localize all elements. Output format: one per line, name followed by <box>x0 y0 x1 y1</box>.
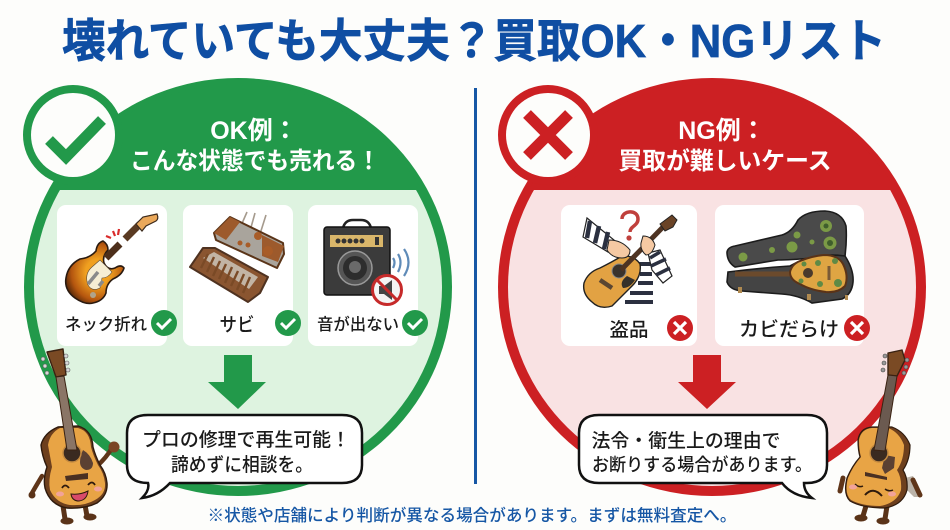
callout: repair advice: 諦めずに相談を。 <box>171 454 313 476</box>
card: mold <box>715 205 870 346</box>
callout: refusal reasons: 法令・衛生上の理由で <box>592 430 780 452</box>
panel heading: 買取が難しいケース <box>618 147 832 175</box>
icon: check mark <box>151 310 177 336</box>
panel: OK examples <box>23 60 452 498</box>
mascot: sad guitar <box>840 350 922 524</box>
icon: silent amplifier <box>324 220 408 304</box>
icon: broken electric guitar <box>66 214 158 303</box>
panel heading: こんな状態でも売れる！ <box>130 148 380 175</box>
icon: thief with guitar <box>583 212 677 307</box>
panel heading <box>130 117 380 175</box>
panel heading <box>618 117 832 175</box>
footnote: ※状態や店舗により判断が異なる場合があります。まずは無料査定へ。 <box>208 505 736 525</box>
callout: repair advice <box>127 415 362 498</box>
icon: cross mark <box>844 315 870 341</box>
arrow: down <box>678 355 736 409</box>
label: mold: カビだらけ <box>739 318 839 341</box>
callout: repair advice: プロの修理で再生可能！ <box>142 429 350 451</box>
panel heading: OK例： <box>210 117 298 145</box>
mascot: happy guitar <box>28 349 120 524</box>
icon: check badge <box>23 85 123 185</box>
icon: cross mark <box>667 315 693 341</box>
title: 壊れていても大丈夫？買取OK・NGリスト <box>62 15 886 67</box>
panel heading: NG例： <box>678 117 766 145</box>
red circle panel <box>498 60 926 496</box>
icon: rusty bridge <box>190 212 284 302</box>
panel: NG examples <box>498 60 926 498</box>
icon: moldy guitar case <box>727 211 853 303</box>
divider line <box>474 88 477 484</box>
card: no sound <box>308 205 428 346</box>
icon: cross badge <box>498 85 598 185</box>
icon: check mark <box>402 310 428 336</box>
icon: check mark <box>275 310 301 336</box>
label: rust: サビ <box>220 314 254 336</box>
card: stolen goods <box>561 205 697 346</box>
green circle panel <box>24 60 452 496</box>
label: stolen goods: 盗品 <box>610 319 648 341</box>
callout: refusal reasons: お断りする場合があります。 <box>592 454 812 475</box>
card: broken neck <box>57 205 177 346</box>
label: no sound: 音が出ない <box>317 314 399 334</box>
card: rust <box>183 205 301 346</box>
callout: refusal reasons <box>579 415 827 498</box>
arrow: down <box>208 355 266 409</box>
label: neck break: ネック折れ <box>65 315 147 334</box>
